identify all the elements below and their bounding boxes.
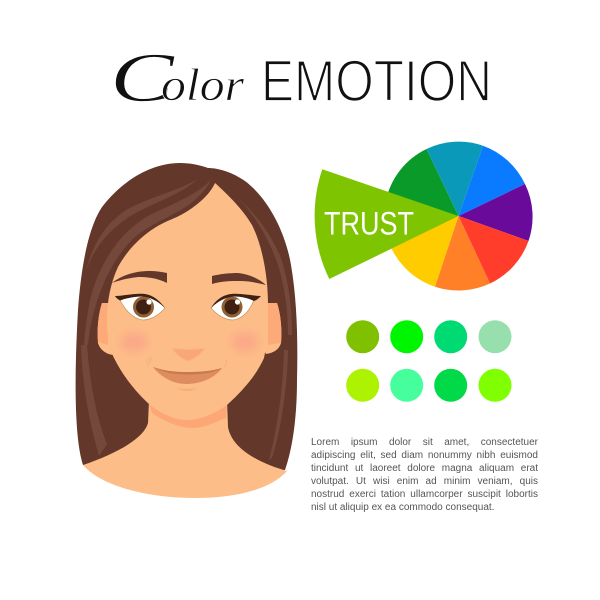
neck shadow xyxy=(149,404,227,428)
swatch row two xyxy=(346,369,512,402)
cheeks xyxy=(120,332,259,352)
hair highlights xyxy=(81,179,292,460)
face xyxy=(107,183,268,420)
wheel slice: yellow xyxy=(386,216,458,287)
wheel slice: green xyxy=(386,149,458,216)
right eye xyxy=(211,294,261,320)
smile lines xyxy=(146,357,227,367)
title xyxy=(110,40,492,117)
body text: tincidunt ut laoreet dolore magna aliquam erat xyxy=(311,462,538,474)
left eye xyxy=(115,294,165,320)
body text: nisl ut aliquip ex ea commodo consequat. xyxy=(311,502,494,512)
title main word: EMOTION xyxy=(261,49,492,114)
highlighted wedge xyxy=(315,169,458,279)
mouth xyxy=(153,367,222,384)
chin mark xyxy=(177,388,197,391)
wedge label: TRUST xyxy=(324,206,414,242)
right eyebrow xyxy=(212,273,266,285)
body text: Lorem ipsum dolor sit amet, consectetuer xyxy=(311,436,538,448)
colour swatches xyxy=(346,320,512,402)
swatch row one xyxy=(346,320,512,353)
left eyebrow xyxy=(112,271,167,283)
neck and shoulders xyxy=(83,400,287,498)
woman portrait xyxy=(76,163,297,498)
wheel slice: purple xyxy=(458,184,533,241)
wheel slice: red xyxy=(458,216,528,284)
right ear xyxy=(258,303,281,354)
body text: adipiscing elit, sed diam nonummy nibh euismod xyxy=(311,450,538,460)
hair xyxy=(76,163,297,470)
nose xyxy=(172,348,205,361)
wheel slice: blue xyxy=(458,146,525,216)
title script word xyxy=(110,40,245,117)
left ear xyxy=(98,303,118,355)
title script word: olor xyxy=(161,59,245,110)
title script word: C xyxy=(110,40,176,117)
body text: nostrud exerci tation ullamcorper suscipit lobortis xyxy=(311,488,538,500)
wheel slice: orange xyxy=(435,216,490,290)
body text xyxy=(311,436,538,512)
body text: volutpat. Ut wisi enim ad minim veniam, quis xyxy=(311,476,538,486)
wheel slice: teal xyxy=(426,142,483,216)
colour wheel xyxy=(315,142,533,290)
